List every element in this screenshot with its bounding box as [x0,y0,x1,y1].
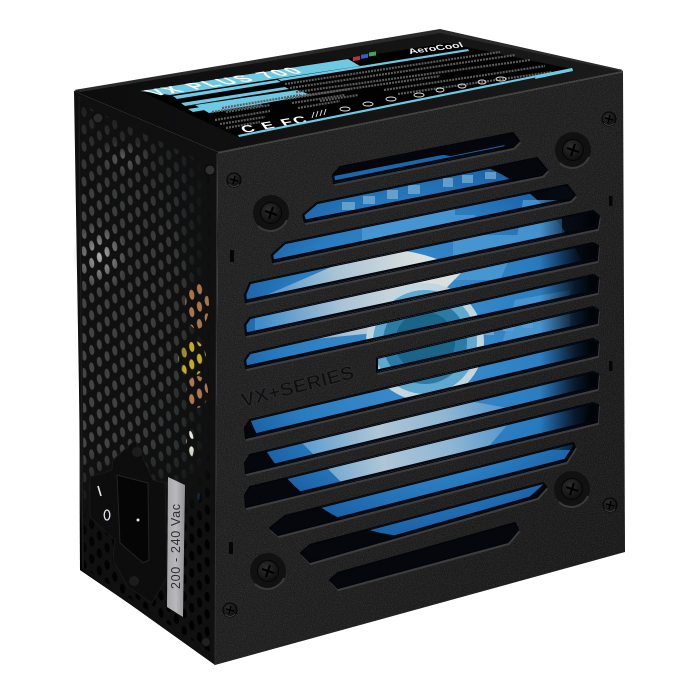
white blade lower [302,402,512,484]
certification marks: C E FC [238,114,310,136]
product illustration: power supply unit [74,29,625,665]
slot shadow rim [245,148,598,536]
dark right edge [542,200,598,450]
power socket plate [90,440,167,603]
side sheet metal [74,91,218,665]
slot highlights [246,135,600,590]
interior seen through the holes [72,95,212,660]
blue streak in first slot [334,145,505,184]
front panel [215,71,625,665]
engraved series name: VX+SERIES [239,362,357,412]
long cyan line [278,49,469,81]
panel screws [223,112,617,617]
bottom cyan line with end band [238,68,573,137]
cyan spec stripes [173,80,311,113]
small notches [229,196,612,554]
slot openings [245,133,599,588]
lighter blade facets [362,200,570,350]
top face of the case [74,29,623,152]
rocker switch marks [98,486,110,520]
outer ring squares [342,172,533,335]
brand logo: AeroCool [407,41,465,56]
perforated side panel [72,91,218,665]
small print [212,52,552,128]
blue fan behind the grille [245,145,598,536]
voltage label [167,477,185,617]
white blade upper [255,248,462,345]
socket opening [117,475,149,563]
RGB mark [353,51,376,61]
model title band [140,59,360,95]
spec sticker [140,41,573,137]
voltage label: 200 - 240 Vac [169,504,183,589]
fan hub [366,283,484,401]
side screws [93,113,215,646]
model name: VX PLUS 700 [140,66,309,98]
